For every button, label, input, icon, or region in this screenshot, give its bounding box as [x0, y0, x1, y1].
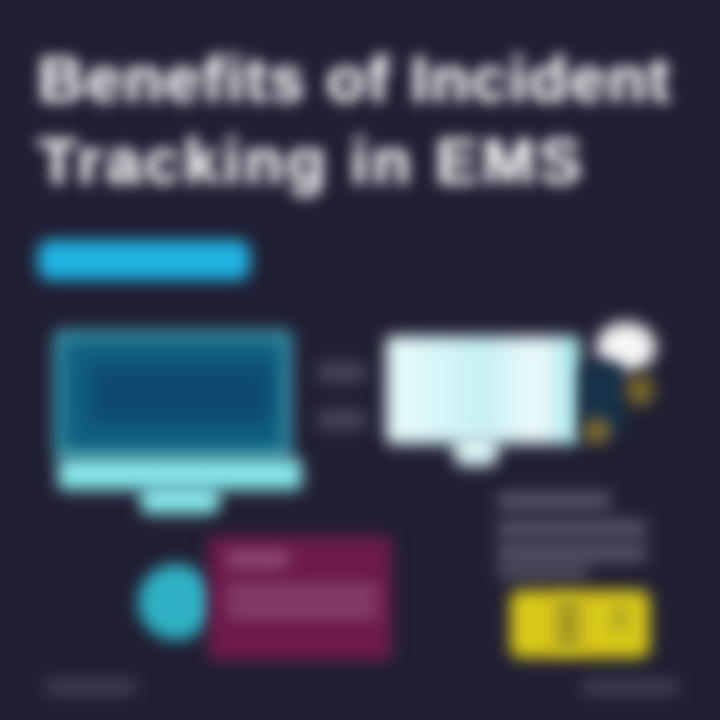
- connector marks: [318, 362, 366, 430]
- title: [29, 43, 678, 208]
- speech card: [373, 323, 592, 479]
- icon: laptop: [42, 318, 314, 527]
- icon: person with badges: [569, 310, 668, 452]
- person body: [582, 362, 624, 438]
- title: Tracking in EMS: [38, 125, 585, 197]
- card pointer: [454, 434, 498, 466]
- person head: [596, 322, 656, 372]
- badge background: [510, 590, 650, 658]
- laptop screen: [54, 330, 292, 460]
- gold accent bottom: [584, 418, 610, 444]
- footer right text: [582, 680, 678, 694]
- callout background: [208, 536, 392, 660]
- laptop screen shading: [90, 364, 270, 424]
- panel: maroon callout: [196, 526, 402, 670]
- badge dark marks: [556, 598, 580, 650]
- laptop base: [58, 458, 302, 490]
- text block: grey description: [492, 484, 652, 586]
- yellow badge: [498, 578, 662, 670]
- cyan accent bar: [38, 240, 250, 280]
- gold accent top: [626, 374, 654, 406]
- card body: [386, 336, 580, 444]
- laptop notch: [140, 486, 220, 514]
- icon: teal circle: [138, 564, 214, 640]
- footer left text: [46, 680, 136, 694]
- callout text lines: [228, 552, 288, 566]
- title: Benefits of Incident: [38, 43, 672, 115]
